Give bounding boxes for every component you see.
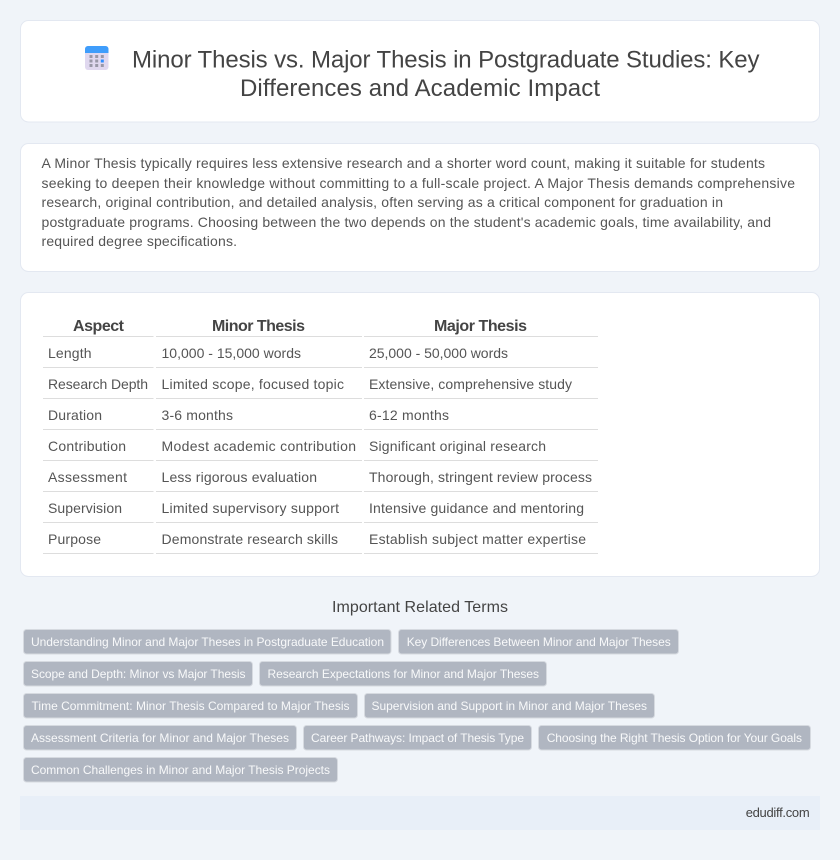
tag: Understanding Minor and Major Theses in Postgraduate Education — [31, 635, 384, 649]
row: research depth: Limited scope, focused topic — [162, 376, 344, 392]
row: purpose — [48, 531, 586, 547]
text block: summary: research, original contribution, and detailed analysis, often serving as a critical component for graduation in — [42, 194, 723, 210]
title: Minor Thesis vs. Major Thesis in Postgraduate Studies: Key — [132, 46, 760, 74]
table rules — [43, 336, 598, 554]
tag — [24, 758, 338, 782]
table header — [73, 318, 527, 335]
row: contribution: Significant original research — [369, 438, 546, 454]
icon: calendar — [85, 46, 108, 70]
tag — [24, 630, 391, 654]
tag: Key Differences Between Minor and Major Theses — [407, 635, 671, 649]
row: contribution: Contribution — [48, 438, 126, 454]
row: length: 10,000 - 15,000 words — [162, 345, 301, 361]
row: length: Length — [48, 345, 92, 361]
tag — [24, 726, 296, 750]
text block: summary: required degree specifications. — [42, 233, 237, 249]
row: duration: 3-6 months — [162, 407, 233, 423]
row: supervision: Supervision — [48, 500, 122, 516]
tag — [24, 662, 252, 686]
text block: summary: A Minor Thesis typically requires less extensive research and a shorter word count, making it suitable for students — [42, 155, 765, 171]
row: supervision: Intensive guidance and mentoring — [369, 500, 584, 516]
row: purpose: Establish subject matter expertise — [369, 531, 586, 547]
row: duration: 6-12 months — [369, 407, 449, 423]
row: assessment: Less rigorous evaluation — [162, 469, 317, 485]
row: supervision — [48, 500, 584, 516]
row: research depth: Extensive, comprehensive study — [369, 376, 572, 392]
row: length: 25,000 - 50,000 words — [369, 345, 508, 361]
title: Differences and Academic Impact — [240, 75, 600, 102]
text block: summary — [42, 155, 795, 249]
tag — [538, 726, 810, 750]
table header: Minor Thesis — [212, 318, 305, 335]
row: duration — [48, 407, 449, 423]
row: assessment: Assessment — [48, 469, 127, 485]
tag: Career Pathways: Impact of Thesis Type — [311, 731, 524, 745]
row: length — [48, 345, 508, 361]
panel: header — [20, 20, 820, 122]
tag — [364, 694, 654, 718]
row: contribution — [48, 438, 546, 454]
row: research depth: Research Depth — [48, 376, 148, 392]
tag: Research Expectations for Minor and Major Theses — [268, 667, 539, 681]
row: assessment — [48, 469, 592, 485]
row: duration: Duration — [48, 407, 102, 423]
row: supervision: Limited supervisory support — [162, 500, 339, 516]
row: research depth — [48, 376, 572, 392]
tag list: related terms — [24, 630, 810, 782]
row: purpose: Demonstrate research skills — [162, 531, 338, 547]
tag: Supervision and Support in Minor and Major Theses — [372, 699, 647, 713]
text block: summary: postgraduate programs. Choosing between the two depends on the student's academic goals, time availability, and — [42, 214, 771, 230]
footer — [20, 796, 820, 830]
text block: summary: seeking to deepen their knowledge without committing to a full-scale project. A Major Thesis demands comprehensive — [42, 175, 795, 191]
tag — [304, 726, 532, 750]
row: assessment: Thorough, stringent review process — [369, 469, 592, 485]
table header: Aspect — [73, 318, 125, 335]
title — [132, 46, 760, 102]
table header: Major Thesis — [434, 318, 527, 335]
tag: Time Commitment: Minor Thesis Compared to Major Thesis — [32, 699, 350, 713]
heading: related terms: Important Related Terms — [332, 599, 508, 616]
tag — [24, 694, 358, 718]
row: contribution: Modest academic contribution — [162, 438, 356, 454]
row: purpose: Purpose — [48, 531, 101, 547]
tag: Choosing the Right Thesis Option for Your Goals — [547, 731, 802, 745]
tag: Assessment Criteria for Minor and Major Theses — [31, 731, 289, 745]
tag: Scope and Depth: Minor vs Major Thesis — [31, 667, 246, 681]
tag: Common Challenges in Minor and Major Thesis Projects — [31, 763, 330, 777]
panel: summary paragraph — [20, 144, 820, 272]
tag — [260, 662, 546, 686]
panel: comparison table — [20, 292, 820, 576]
footer: edudiff.com — [746, 805, 810, 820]
tag — [398, 630, 678, 654]
